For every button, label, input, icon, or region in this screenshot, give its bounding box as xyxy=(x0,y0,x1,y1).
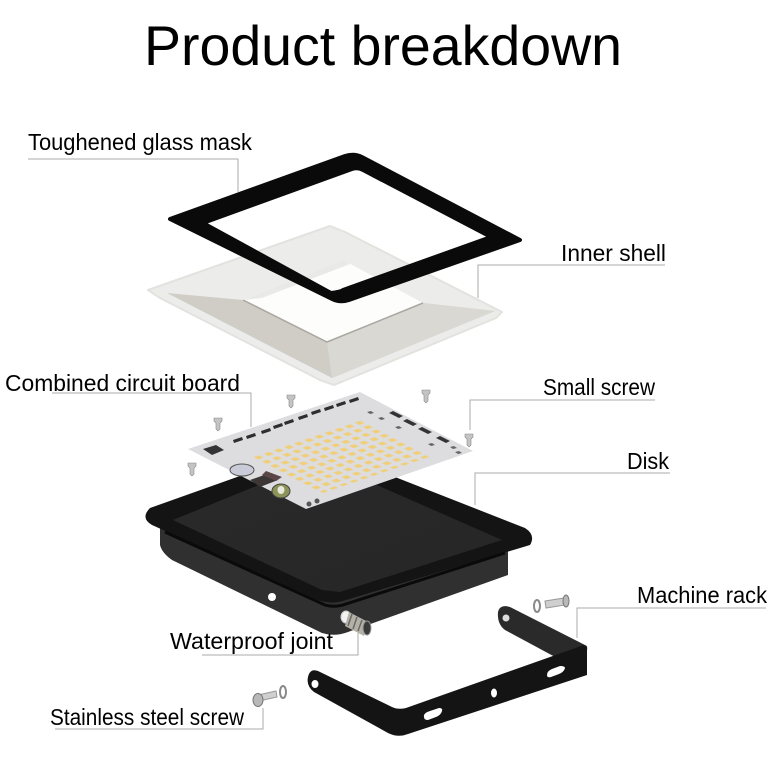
disk inner face xyxy=(173,460,502,592)
leader: waterproof joint xyxy=(202,633,358,655)
label: toughened glass mask: Toughened glass mask xyxy=(28,129,252,155)
label: disk: Disk xyxy=(627,448,669,474)
leader: disk xyxy=(475,473,670,505)
leader: stainless steel screw xyxy=(55,708,263,729)
rack back arm xyxy=(498,606,585,658)
component: inner shell xyxy=(148,226,502,385)
rack arm hole xyxy=(502,614,510,622)
switch xyxy=(203,445,224,455)
component: disk xyxy=(145,450,532,635)
title: Product breakdown xyxy=(144,14,622,77)
label: machine rack: Machine rack xyxy=(637,582,767,608)
leader: small screw xyxy=(470,400,655,430)
leader: toughened glass mask xyxy=(28,159,238,192)
mounting hole xyxy=(268,593,276,601)
rack strap xyxy=(308,645,587,736)
label: small screw: Small screw xyxy=(543,374,655,400)
component: toughened glass mask xyxy=(170,155,520,301)
leader: inner shell xyxy=(478,265,665,298)
LED array xyxy=(250,419,432,493)
leader: machine rack xyxy=(577,608,766,638)
component: machine rack xyxy=(308,606,587,736)
icon: rack screw with washer xyxy=(534,595,569,612)
driver chips xyxy=(233,397,359,443)
icon: waterproof joint xyxy=(341,611,371,636)
label: stainless steel screw: Stainless steel screw xyxy=(50,704,244,730)
leader: combined circuit board xyxy=(52,393,251,427)
label: waterproof joint: Waterproof joint xyxy=(170,628,334,654)
icon: stainless steel screw with washer xyxy=(253,686,286,706)
disk flange xyxy=(145,450,532,602)
icon: board screws xyxy=(188,390,473,476)
side pads xyxy=(367,411,462,454)
label: inner shell: Inner shell xyxy=(561,240,666,266)
capacitors xyxy=(230,464,254,476)
component: combined circuit board xyxy=(188,392,473,509)
disk body xyxy=(160,528,508,635)
side chips xyxy=(389,411,450,443)
label: combined circuit board: Combined circuit board xyxy=(5,370,240,396)
